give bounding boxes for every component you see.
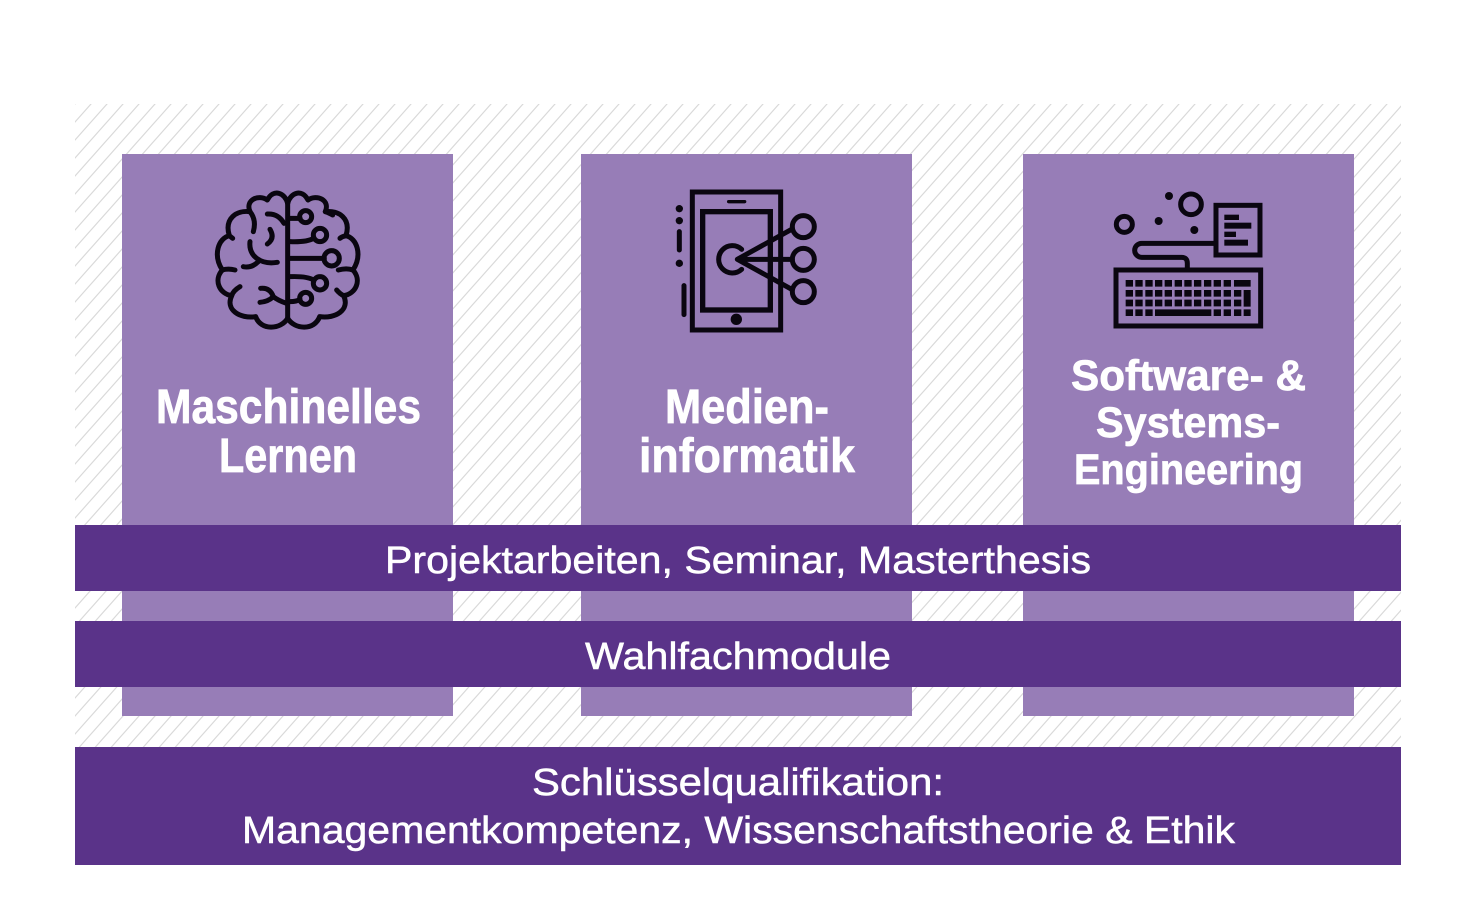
bar: Wahlfachmodule: Wahlfachmodule — [585, 636, 891, 678]
heading: Maschinelles Lernen: Lernen — [219, 430, 357, 483]
heading: Maschinelles Lernen — [156, 381, 421, 483]
icon: brain with circuit nodes — [217, 193, 358, 327]
icon: tablet with network nodes — [676, 192, 814, 330]
hatched background panel — [75, 104, 1401, 747]
bar: Projektarbeiten: Projektarbeiten, Seminar, Masterthesis — [385, 540, 1091, 582]
heading: Software- und Systems-Engineering: Systems- — [1096, 399, 1280, 447]
heading: Software- und Systems-Engineering: Software- & — [1071, 352, 1306, 400]
panel: Maschinelles Lernen — [122, 154, 453, 716]
bar: Schlüsselqualifikation — [75, 747, 1401, 865]
bar: Projektarbeiten — [75, 525, 1401, 591]
bar: Schlüsselqualifikation: Managementkompetenz, Wissenschaftstheorie & Ethik — [242, 810, 1236, 852]
heading: Software- und Systems-Engineering — [1071, 352, 1306, 494]
heading: Medieninformatik: Medien- — [665, 381, 829, 434]
bar: Wahlfachmodule — [75, 621, 1401, 687]
heading: Medieninformatik: informatik — [639, 430, 855, 483]
panel: Medieninformatik — [581, 154, 912, 716]
icon: keyboard with document — [1116, 192, 1261, 326]
heading: Software- und Systems-Engineering: Engineering — [1074, 446, 1303, 494]
heading: Medieninformatik — [639, 381, 855, 483]
panel: Software- und Systems-Engineering — [1023, 154, 1354, 716]
heading: Maschinelles Lernen: Maschinelles — [156, 381, 421, 434]
bar: Schlüsselqualifikation: Schlüsselqualifikation: — [532, 762, 944, 804]
